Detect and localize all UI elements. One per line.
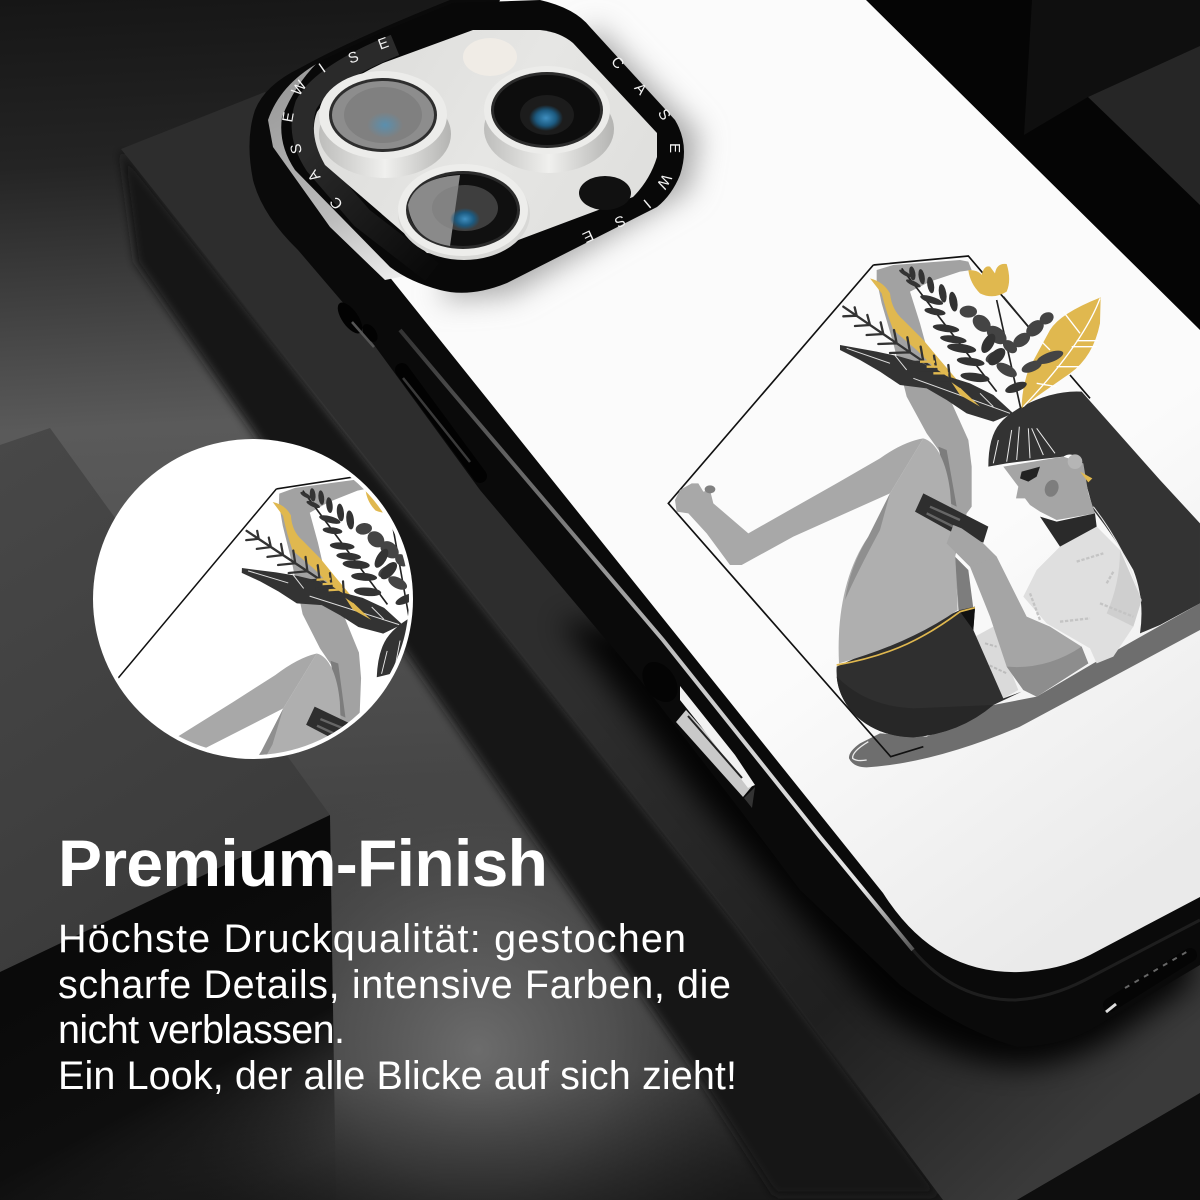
camera ring <box>281 0 684 293</box>
ring text: CASEWISE left: E <box>279 111 298 124</box>
chrome rim line <box>400 330 913 950</box>
ring text: CASEWISE right: A <box>631 80 650 98</box>
bottom port <box>1106 950 1190 1012</box>
mute switch <box>333 299 381 347</box>
ring text: CASEWISE right: S <box>612 211 628 231</box>
ring text: CASEWISE right: I <box>640 196 654 211</box>
zoom circle callout <box>93 439 413 759</box>
lens top-right <box>484 66 614 173</box>
body text: scharfe Details, intensive Farben, die <box>58 963 731 1007</box>
rim line around corner <box>913 920 1200 1000</box>
ring text: CASEWISE right: E <box>666 143 683 153</box>
bottom right dark block <box>1017 1093 1200 1200</box>
ring text: CASEWISE left: C <box>326 193 347 213</box>
case body <box>249 0 1200 1047</box>
ring text: CASEWISE right: C <box>607 53 627 73</box>
ring printed band left <box>303 45 432 272</box>
ring text: CASEWISE right: W <box>653 171 675 192</box>
drop shadow <box>560 620 1190 1066</box>
ring text: CASEWISE right <box>580 53 683 246</box>
side power button chrome <box>635 655 755 808</box>
ring text: CASEWISE left: A <box>304 167 324 185</box>
lower left block top <box>0 428 330 830</box>
flash <box>463 38 517 76</box>
microphone hole <box>579 176 631 210</box>
white face crescent around the camera <box>268 63 410 280</box>
camera shadow on face <box>440 25 700 300</box>
heading: Premium-Finish <box>58 826 548 900</box>
ring text: CASEWISE left <box>279 34 391 213</box>
top right block top <box>1088 46 1200 205</box>
white circle <box>93 439 413 759</box>
camera glass <box>314 30 657 257</box>
camera island <box>268 0 684 293</box>
illustration: woman reading phone with plants <box>668 256 1200 767</box>
magnified illustration <box>118 476 409 755</box>
ring text: CASEWISE right: E <box>580 226 596 246</box>
lower left block front <box>0 815 336 1200</box>
lens top-left <box>319 71 451 178</box>
ring text: CASEWISE left: S <box>287 142 306 155</box>
top right block strip <box>1024 0 1200 135</box>
phone case <box>249 0 1200 1066</box>
ring text: CASEWISE right: S <box>654 106 674 123</box>
ring text: CASEWISE left: W <box>288 77 311 99</box>
body text <box>58 917 737 1098</box>
soft light glow on plinth face <box>286 855 706 1200</box>
body text: nicht verblassen. <box>58 1008 345 1052</box>
ring text: CASEWISE left: S <box>346 48 361 67</box>
lens bottom <box>398 164 530 260</box>
body text: Ein Look, der alle Blicke auf sich zieht! <box>58 1054 737 1098</box>
ring text: CASEWISE left: E <box>376 34 391 53</box>
top right black backdrop <box>866 0 1200 330</box>
slab dark side band <box>121 149 940 1195</box>
body text: Höchste Druckqualität: gestochen <box>58 917 686 961</box>
volume button <box>402 370 480 476</box>
white printed face <box>380 0 1200 972</box>
ring text: CASEWISE left: I <box>316 60 329 76</box>
